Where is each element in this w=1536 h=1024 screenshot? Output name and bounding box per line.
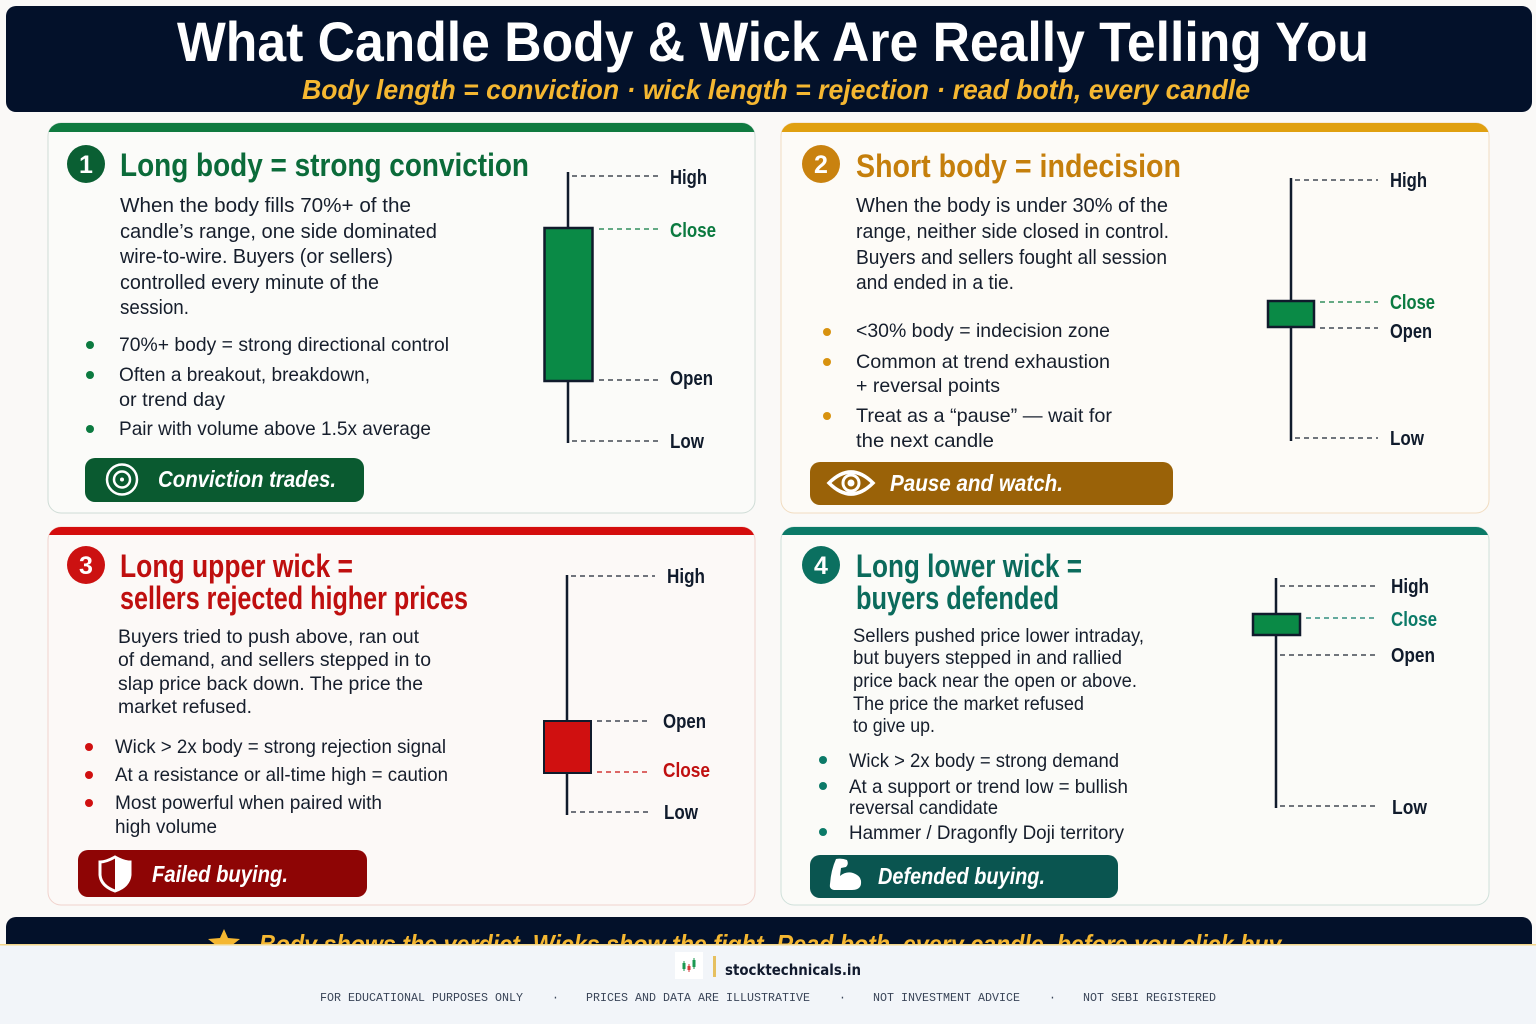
logo [675,952,716,979]
description 1: controlled every minute of the [120,272,379,294]
heading 2: Short body = indecision [856,148,1181,184]
description 4: The price the market refused [853,693,1084,715]
disclaimer: PRICES AND DATA ARE ILLUSTRATIVE [586,992,810,1005]
candle diagram 3: Open [663,710,706,733]
callout 2: Pause and watch. [890,470,1063,496]
disclaimer: NOT SEBI REGISTERED [1083,992,1216,1005]
description 1 [119,195,437,319]
icon: shield [100,857,130,891]
subtitle: Body length = conviction · wick length = rejection · read both, every candle [302,74,1250,105]
candle diagram 1: Open [670,367,713,390]
candle diagram 4: High [1391,575,1429,598]
bullets 1 [86,334,449,440]
candle diagram 3: Close [663,759,710,782]
candle diagram 1: Low [670,430,704,453]
candle diagram 1: Close [670,219,716,242]
disclaimer: FOR EDUCATIONAL PURPOSES ONLY [320,992,523,1005]
bullets 4: reversal candidate [849,797,998,819]
number badge 1: 1 [79,151,93,179]
number badge 2 [802,145,840,183]
number badge 4: 4 [814,552,828,580]
candle diagram 2: High [1390,169,1427,192]
candle diagram 4: Low [1392,796,1427,819]
number badge 1 [67,145,105,183]
heading 4: Long lower wick = [856,548,1082,584]
title: What Candle Body & Wick Are Really Telling You [177,10,1369,73]
description 3 [118,626,431,718]
bullets 2: the next candle [856,430,994,452]
number badge 2: 2 [814,151,828,179]
description 2 [856,195,1169,294]
heading 3: sellers rejected higher prices [120,580,468,616]
heading 3: Long upper wick = [120,548,353,584]
callout 1: Conviction trades. [158,466,336,492]
icon: flexed arm [830,859,861,890]
number badge 3 [67,546,105,584]
bullets 1: 70%+ body = strong directional control [119,334,449,356]
bullets 4: Wick > 2x body = strong demand [849,750,1119,772]
candle diagram 3: Low [664,801,698,824]
disclaimer: · [552,992,559,1005]
panel: long upper wick [48,527,755,905]
brand name: stocktechnicals.in [725,961,861,979]
heading 3 [120,548,468,616]
candle diagram 1: High [670,166,707,189]
takeaway banner: Body shows the verdict. Wicks show the fight. Read both, every candle, before you click buy. [259,929,1287,959]
candle diagram 4: Open [1391,644,1435,667]
heading 1: Long body = strong conviction [120,147,529,183]
description 1: When the body fills 70%+ of the [120,195,411,217]
icon: target [107,464,137,494]
description 4: Sellers pushed price lower intraday, [853,625,1144,647]
callout 1 [85,458,364,502]
heading 4 [856,548,1082,616]
bullets 3: high volume [115,816,217,838]
bullets 3 [85,736,448,838]
disclaimer [320,992,1216,1005]
icon: star [208,929,240,946]
description 2: Buyers and sellers fought all session [856,247,1167,269]
candle diagram 3: High [667,565,705,588]
title banner [6,6,1532,112]
description 3: slap price back down. The price the [118,673,423,695]
footer [0,944,1536,1024]
description 1: session. [120,297,189,319]
description 3: market refused. [118,696,252,718]
candle diagram 2: Low [1390,427,1424,450]
callout 3: Failed buying. [152,861,288,887]
number badge 4 [802,546,840,584]
description 3: of demand, and sellers stepped in to [118,649,431,671]
candle diagram 2 [1268,169,1435,450]
heading 4: buyers defended [856,580,1059,616]
bullets 2: <30% body = indecision zone [856,320,1110,342]
bullets 2 [823,320,1113,452]
bullets 4: At a support or trend low = bullish [849,776,1128,798]
bullets 1: Pair with volume above 1.5x average [119,418,431,440]
number badge 3: 3 [79,552,93,580]
bullets 1: or trend day [119,389,225,411]
description 2: When the body is under 30% of the [856,195,1168,217]
bullets 2: Common at trend exhaustion [856,351,1110,373]
candle diagram 2: Open [1390,320,1432,343]
panel: short body [781,123,1489,513]
bullets 3: Wick > 2x body = strong rejection signal [115,736,446,758]
bullets 3: At a resistance or all-time high = caution [115,764,448,786]
description 4: price back near the open or above. [853,670,1137,692]
callout 4 [810,855,1118,898]
callout 3 [78,850,367,897]
takeaway banner [6,917,1532,967]
bullets 2: + reversal points [856,375,1000,397]
bullets 2: Treat as a “pause” — wait for [856,405,1113,427]
description 1: candle’s range, one side dominated [120,221,437,243]
bullets 3: Most powerful when paired with [115,792,382,814]
panel: long lower wick [781,527,1489,905]
candle diagram 2: Close [1390,291,1435,314]
panel: long body [48,123,755,513]
candle diagram 1 [544,166,716,453]
description 4: but buyers stepped in and rallied [853,647,1122,669]
description 4 [853,625,1144,737]
candle diagram 3 [544,565,710,824]
candle diagram 4: Close [1391,608,1437,631]
disclaimer: NOT INVESTMENT ADVICE [873,992,1020,1005]
description 4: to give up. [853,715,935,737]
bullets 1: Often a breakout, breakdown, [119,364,370,386]
disclaimer: · [839,992,846,1005]
bullets 4: Hammer / Dragonfly Doji territory [849,822,1124,844]
icon: eye [829,472,873,494]
callout 2 [810,462,1173,505]
candle diagram 4 [1253,575,1437,819]
bullets 4 [819,750,1128,844]
description 1: wire-to-wire. Buyers (or sellers) [119,246,393,268]
description 3: Buyers tried to push above, ran out [118,626,420,648]
callout 4: Defended buying. [878,863,1045,889]
description 2: range, neither side closed in control. [856,221,1169,243]
disclaimer: · [1049,992,1056,1005]
description 2: and ended in a tie. [856,272,1014,294]
